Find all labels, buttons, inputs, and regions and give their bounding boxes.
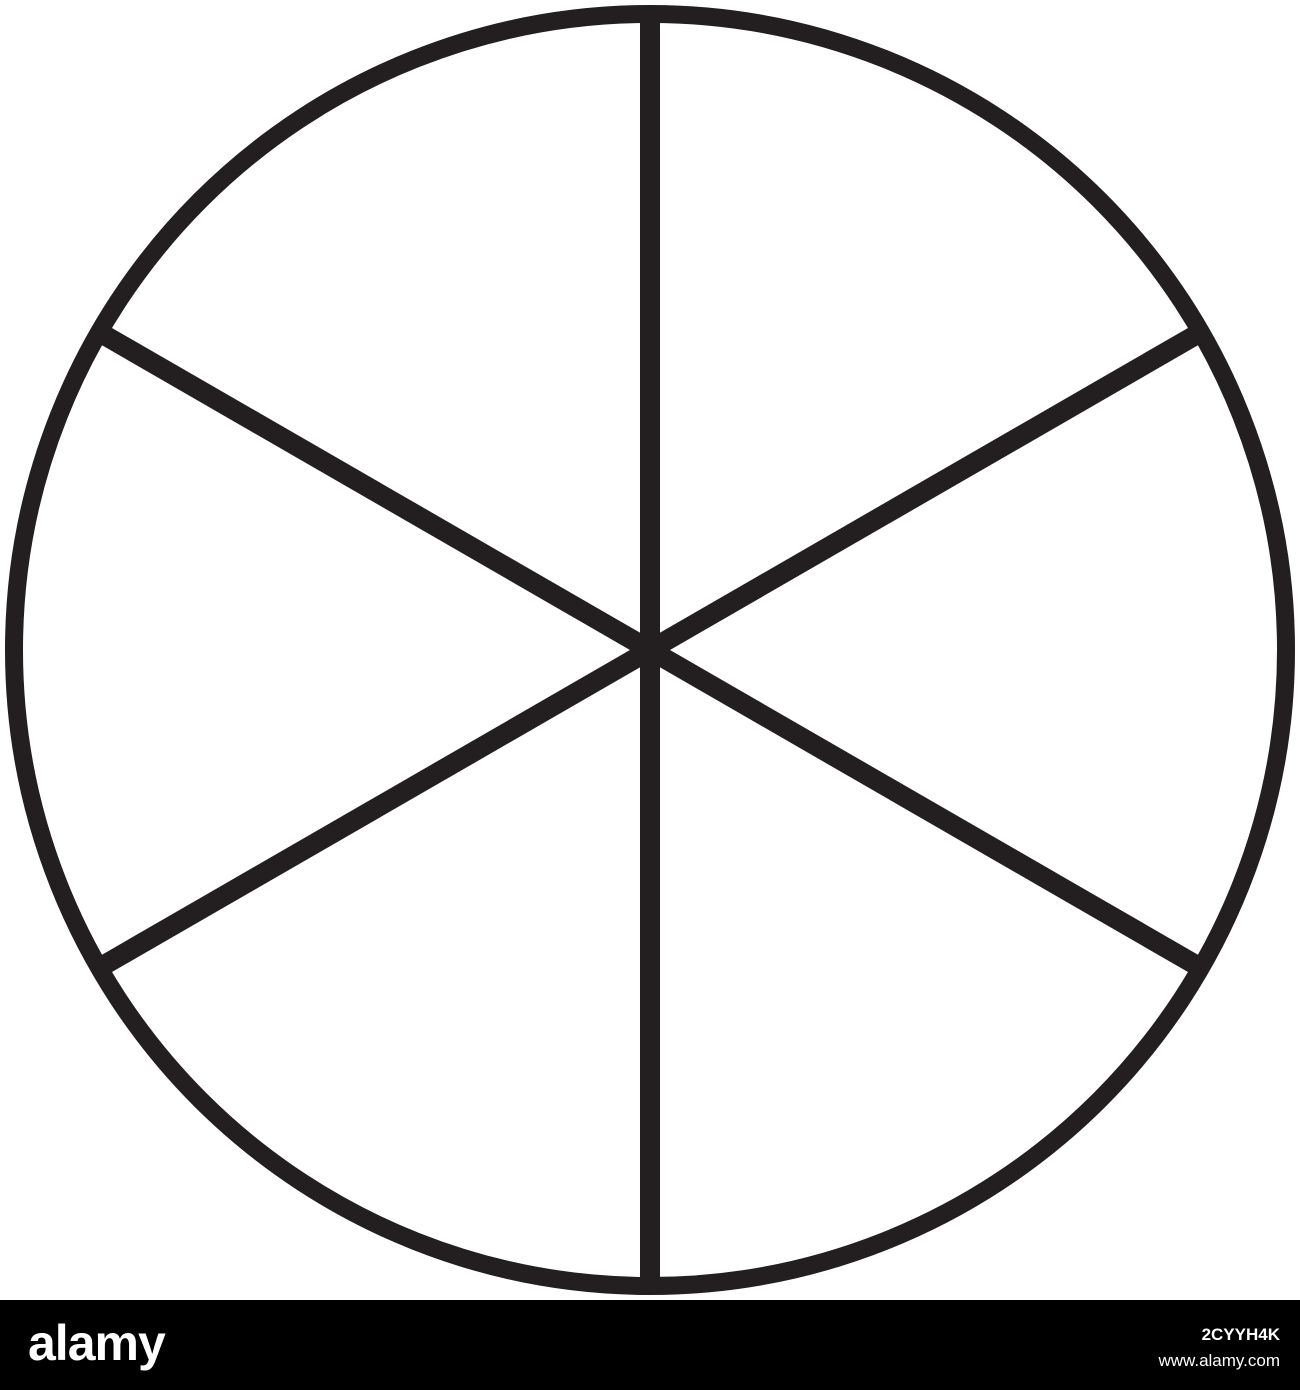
footer url: www.alamy.com	[1157, 1351, 1280, 1370]
vertical spoke	[640, 14, 660, 1286]
diagonal spoke top-right to bottom-left	[99, 332, 1201, 968]
footer logo text: alamy	[28, 1315, 166, 1371]
diagonal spoke top-left to bottom-right	[99, 332, 1201, 968]
footer image id: 2CYYH4K	[1202, 1325, 1281, 1344]
footer bar	[0, 1300, 1300, 1390]
